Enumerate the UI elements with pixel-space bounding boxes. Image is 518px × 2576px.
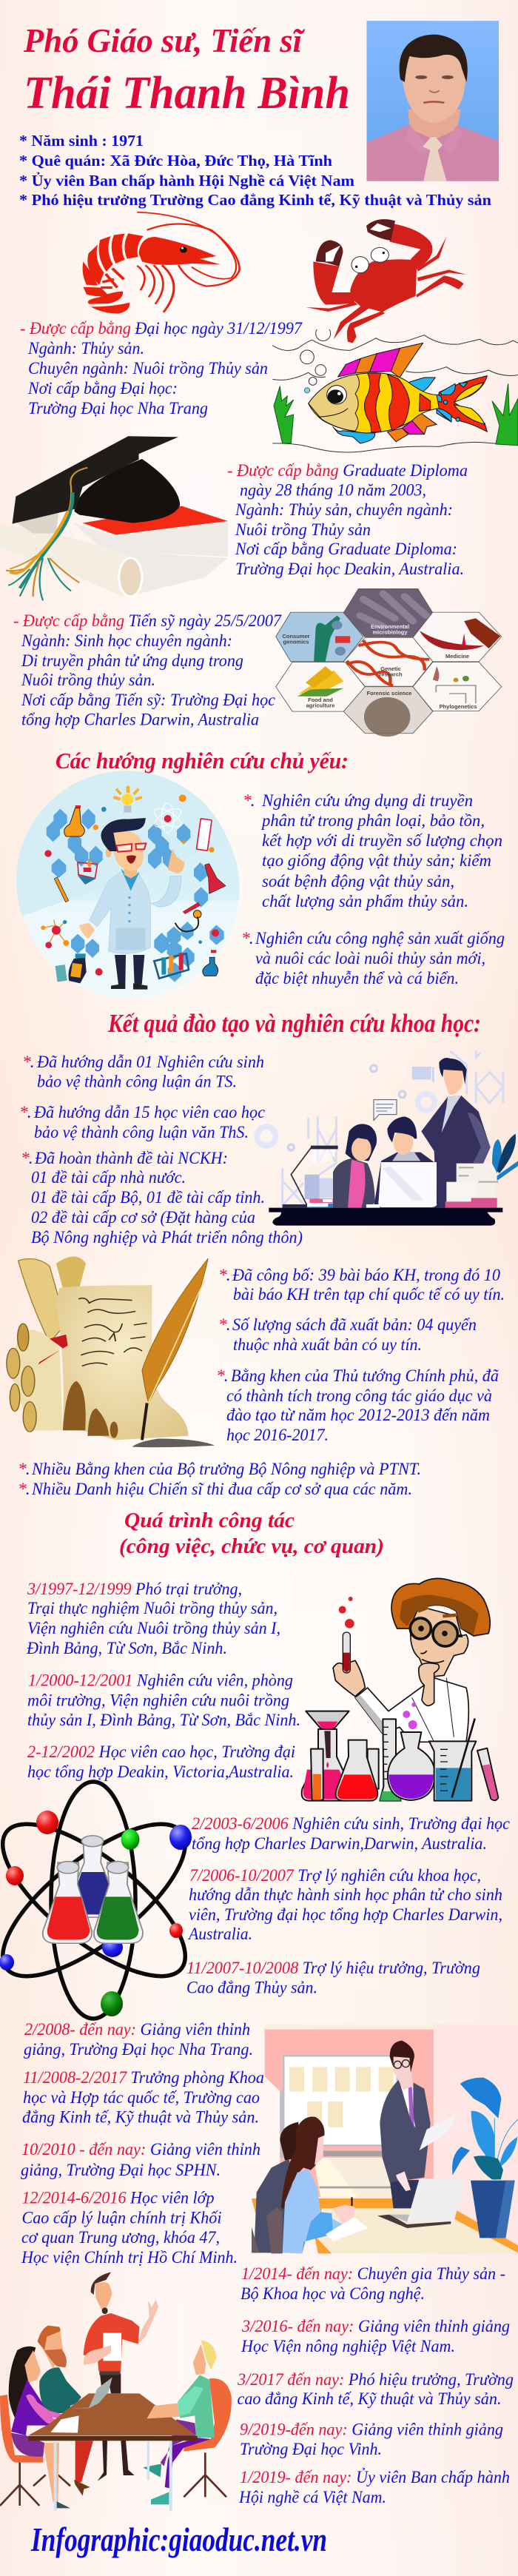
label: phylogenetics: Phylogenetics xyxy=(440,703,477,710)
text block: doctorate xyxy=(13,611,282,730)
text block: career 1997-2002: 1/2000-12/2001 Nghiên cứu viên, phòng xyxy=(28,1671,293,1691)
illustration: lab scientist and flasks xyxy=(302,1578,498,1801)
text block: career 2008-2016: học và Hợp tác quốc tế, Trường cao xyxy=(23,2088,260,2107)
text block: career 1997-2002: Trại thực nghiệm Nuôi trồng thủy sản, xyxy=(27,1599,278,1618)
text block: publications and awards: có thành tích trong công tác giáo dục và xyxy=(226,1386,492,1406)
text block: career 1997-2002: 3/1997-12/1999 Phó trại trưởng, xyxy=(27,1580,242,1599)
text block: supervision and projects: Đã hoàn thành đề tài NCKH: xyxy=(34,1149,228,1168)
text block: graduate diploma: Trường Đại học Deakin, Australia. xyxy=(235,560,464,579)
text block: career 2008-2016: 11/2008-2/2017 Trưởng phòng Khoa xyxy=(23,2068,264,2087)
text block: research direction 1: *. xyxy=(243,791,255,811)
text block: current positions: Hội nghề cá Việt Nam. xyxy=(238,2488,386,2507)
title: Thái Thanh Bình xyxy=(24,68,350,118)
illustration: atom with flasks xyxy=(0,1782,207,2019)
seated woman xyxy=(333,1124,377,1208)
title: Phó Giáo sư, Tiến sĩ xyxy=(23,22,305,59)
text block: current positions: 3/2016- đến nay: Giảng viên thỉnh giảng xyxy=(241,2317,510,2336)
test tube xyxy=(343,1632,350,1673)
text block: publications and awards: Số lượng sách đã xuất bản: 04 quyển xyxy=(232,1315,477,1335)
seated man blonde xyxy=(143,2341,217,2504)
text block: doctorate: Nuôi trồng thủy sản. xyxy=(21,671,155,690)
text block: career 2003-2008: 2/2003-6/2006 Nghiên cứu sinh, Trường đại học xyxy=(192,1814,511,1834)
red trousers xyxy=(74,2441,93,2496)
text block: career 2003-2008: 11/2007-10/2008 Trợ lý hiệu trưởng, Trường xyxy=(186,1959,480,1978)
illustration: scientist in circle xyxy=(16,771,240,998)
table xyxy=(28,2378,198,2511)
text block: publications and awards: *. xyxy=(218,1266,230,1285)
illustration: office team at desk xyxy=(257,1050,518,1226)
text block: supervision and projects: *. xyxy=(21,1149,33,1168)
speech bubble xyxy=(374,1100,397,1120)
standing man xyxy=(421,1058,491,1208)
text block: graduate diploma xyxy=(227,461,468,579)
text block: bachelor degree: Ngành: Thủy sản. xyxy=(27,339,144,358)
text block: research direction 2: và nuôi các loài nuôi thủy sản mới, xyxy=(255,949,485,968)
text block: bachelor degree: Chuyên ngành: Nuôi trồng Thủy sản xyxy=(28,359,268,378)
icon: fish in water xyxy=(272,329,518,452)
text block: current positions: 1/2014- đến nay: Chuyên gia Thủy sản - xyxy=(241,2264,505,2284)
text block: research direction 2 xyxy=(241,929,505,988)
text block: career 2003-2008: Australia. xyxy=(187,1925,252,1944)
text block: career 2003-2008: viên, Trường đại học tổng hợp Charles Darwin, xyxy=(189,1905,502,1925)
text block: current positions: 9/2019-đến nay: Giảng viên thỉnh giảng xyxy=(240,2421,503,2440)
text block: supervision and projects: bảo vệ thành công luận án TS. xyxy=(37,1072,237,1091)
text block: supervision and projects: 01 đề tài cấp nhà nước. xyxy=(31,1168,186,1187)
text block: current positions: 3/2017 đến nay: Phó hiệu trưởng, Trường xyxy=(237,2370,514,2389)
text block: bachelor degree: Trường Đại học Nha Trang xyxy=(28,399,208,418)
text block: career 2008-2016: 12/2014-6/2016 Học viên lớp xyxy=(22,2188,215,2207)
plant xyxy=(492,1134,518,1181)
text block: career 2008-2016: 2/2008- đến nay: Giảng viên thỉnh xyxy=(24,2020,250,2039)
text block: career 1997-2002: Viện nghiên cứu Nuôi trồng thủy sản I, xyxy=(27,1619,280,1638)
text block: honours: Nhiều Danh hiệu Chiến sĩ thi đua cấp cơ sở qua các năm. xyxy=(31,1480,412,1499)
label: medicine: Medicine xyxy=(445,653,469,660)
text block: doctorate: Nơi cấp bằng Tiến sỹ: Trường Đại học xyxy=(21,691,276,710)
text block: research direction 1: phân tử trong phân loại, bảo tồn, xyxy=(260,811,485,831)
text block: career 2003-2008 xyxy=(186,1814,511,1997)
text block: career 2008-2016: đẳng Kinh tế, Kỹ thuật và Thủy sản. xyxy=(22,2108,259,2127)
text block: research direction 2: đặc biệt nhuyễn thể và cá biển. xyxy=(255,969,459,988)
text block: supervision and projects: Đã hướng dẫn 15 học viên cao học xyxy=(33,1103,266,1122)
books xyxy=(283,1198,334,1208)
text block: doctorate: - Được cấp bằng Tiến sỹ ngày 25/5/2007 xyxy=(13,611,282,631)
text block: graduate diploma: ngày 28 tháng 10 năm 2003, xyxy=(240,481,426,500)
text block: graduate diploma: - Được cấp bằng Graduate Diploma xyxy=(227,461,468,480)
illustration: presentation meeting xyxy=(252,2025,518,2254)
text block: publications and awards: *. xyxy=(216,1366,228,1386)
label: environmental microbiology: microbiology xyxy=(372,629,408,635)
text block: current positions: cao đẳng Kinh tế, Kỹ thuật và Thủy sản. xyxy=(237,2389,502,2409)
text block: career 1997-2002: 2-12/2002 Học viên cao học, Trường đại xyxy=(27,1743,295,1762)
icon: shrimp xyxy=(83,212,240,314)
heading: career history xyxy=(119,1509,384,1558)
icon: crab xyxy=(306,219,466,343)
text block: publications and awards: *. xyxy=(218,1315,230,1335)
text block: research direction 1 xyxy=(243,791,502,911)
portrait photo xyxy=(367,21,499,181)
flask set xyxy=(302,1711,498,1801)
text block: publications and awards: học 2016-2017. xyxy=(226,1426,329,1445)
light bulb xyxy=(113,786,142,813)
icon: graduation cap, book and diploma xyxy=(0,436,228,600)
text block: bachelor degree: - Được cấp bằng Đại học ngày 31/12/1997 xyxy=(20,319,303,338)
text block: career 2003-2008: Cao đẳng Thủy sản. xyxy=(186,1978,317,1997)
text block: research direction 1: kết hợp với di truyền số lượng chọn xyxy=(262,831,502,851)
text block: career 2008-2016: giảng, Trường Đại học SPHN. xyxy=(21,2161,221,2180)
label: food and agriculture: agriculture xyxy=(306,702,334,709)
text block: career 2003-2008: tổng hợp Charles Darwin,Darwin, Australia. xyxy=(192,1834,487,1854)
text block: career 1997-2002: Đình Bảng, Từ Sơn, Bắc Ninh. xyxy=(26,1639,227,1658)
text block: supervision and projects: Bộ Nông nghiệp và Phát triển nông thôn) xyxy=(31,1228,303,1247)
footer credit: Infographic:giaoduc.net.vn xyxy=(30,2520,327,2558)
personal info list: * Ủy viên Ban chấp hành Hội Nghề cá Việt Nam xyxy=(19,172,355,189)
man xyxy=(79,818,184,990)
text block: current positions: Bộ Khoa học và Công nghệ. xyxy=(240,2284,425,2304)
text block: current positions xyxy=(237,2264,514,2507)
text block: research direction 1: chất lượng sản phẩm thủy sản. xyxy=(262,892,468,911)
text block: career 2008-2016: 10/2010 - đến nay: Giảng viên thỉnh xyxy=(21,2140,260,2159)
text block: publications and awards: thuộc nhà xuất bản có uy tín. xyxy=(233,1335,422,1355)
seated woman xyxy=(9,2347,70,2508)
paper stacks xyxy=(445,1164,498,1208)
seated man with beard xyxy=(38,2326,81,2413)
label: forensic science: Forensic science xyxy=(367,690,411,697)
text block: graduate diploma: Nuôi trồng Thủy sản xyxy=(235,520,371,540)
text block: career 1997-2002: học tổng hợp Deakin, Victoria,Australia. xyxy=(27,1762,294,1782)
text block: career 1997-2002: thủy sản I, Đình Bảng, Từ Sơn, Bắc Ninh. xyxy=(27,1711,300,1730)
label: consumer genomics: genomics xyxy=(283,638,309,645)
text block: supervision and projects: bảo vệ thành công luận văn ThS. xyxy=(34,1123,249,1142)
text block: supervision and projects: *. xyxy=(22,1053,34,1072)
illustration: parchment scrolls and quill xyxy=(7,1256,215,1447)
text block: supervision and projects: *. xyxy=(19,1103,31,1122)
personal info list: * Phó hiệu trưởng Trường Cao đẳng Kinh tế, Kỹ thuật và Thủy sản xyxy=(19,191,491,209)
text block: doctorate: Di truyền phân tử ứng dụng trong xyxy=(21,651,243,671)
text block: supervision and projects: 01 đề tài cấp Bộ, 01 đề tài cấp tỉnh. xyxy=(31,1188,265,1207)
label: food and agriculture: Food and xyxy=(308,697,333,703)
label: genetic research: Genetic xyxy=(380,665,401,672)
laptop xyxy=(366,1162,437,1208)
label: consumer genomics: Consumer xyxy=(282,633,310,640)
text block: career 2008-2016: Cao cấp lý luận chính trị Khối xyxy=(22,2209,222,2228)
text block: career 2003-2008: 7/2006-10/2007 Trợ lý nghiên cứu khoa học, xyxy=(189,1866,481,1885)
text block: publications and awards: đào tạo từ năm học 2012-2013 đến năm xyxy=(226,1406,490,1425)
personal info list xyxy=(19,132,491,209)
text block: bachelor degree: Nơi cấp bằng Đại học: xyxy=(27,379,178,398)
heading: research directions: Các hướng nghiên cứu chủ yếu: xyxy=(56,748,349,774)
text block: research direction 2: *. xyxy=(241,929,253,948)
text block: research direction 1: soát bệnh động vật thủy sản, xyxy=(262,872,454,891)
personal info list: * Năm sinh : 1971 xyxy=(19,132,144,150)
title xyxy=(23,22,350,118)
text block: graduate diploma: Ngành: Thủy sản, chuyên ngành: xyxy=(235,500,453,520)
text block: career 2008-2016: giảng, Trường Đại học Nha Trang. xyxy=(24,2040,253,2059)
text block: honours: *. xyxy=(18,1460,30,1479)
text block: research direction 1: tạo giống động vật thủy sản; kiểm xyxy=(262,851,491,871)
text block: research direction 1: Nghiên cứu ứng dụng di truyền xyxy=(261,791,473,811)
laptop xyxy=(377,2178,465,2228)
text block: publications and awards: Đã công bố: 39 bài báo KH, trong đó 10 xyxy=(232,1266,500,1285)
orange flask xyxy=(64,805,84,836)
personal info list: * Quê quán: Xã Đức Hòa, Đức Thọ, Hà Tĩnh xyxy=(19,152,332,170)
standing man xyxy=(84,2272,158,2481)
heading: career history: (công việc, chức vụ, cơ quan) xyxy=(119,1534,384,1558)
text block: honours xyxy=(18,1460,421,1499)
text block: research direction 2: Nghiên cứu công nghệ sản xuất giống xyxy=(255,929,505,948)
text block: career 1997-2002: môi trường, Viện nghiên cứu nuôi trồng xyxy=(27,1691,289,1710)
desk lamp xyxy=(291,1147,338,1205)
text block: bachelor degree xyxy=(20,319,303,418)
text block: career 2008-2016: cơ quan Trung ương, khóa 47, xyxy=(21,2228,220,2247)
hexagon panel: genetics applications xyxy=(276,588,502,737)
text block: career 1997-2002 xyxy=(26,1580,300,1782)
heading: career history: Quá trình công tác xyxy=(124,1509,295,1532)
text block: current positions: Học Viện nông nghiệp Việt Nam. xyxy=(240,2337,455,2356)
text block: supervision and projects xyxy=(19,1053,303,1247)
scientist xyxy=(333,1578,490,1742)
potted plant xyxy=(452,2078,518,2238)
illustration: team around a table xyxy=(0,2272,232,2511)
presenter xyxy=(380,2041,457,2208)
right chair xyxy=(184,2378,232,2497)
text block: supervision and projects: Đã hướng dẫn 01 Nghiên cứu sinh xyxy=(36,1053,264,1072)
text block: publications and awards: Bằng khen của Thủ tướng Chính phủ, đã xyxy=(231,1366,499,1386)
text block: career 2008-2016 xyxy=(21,2020,264,2267)
seated man xyxy=(374,1116,439,1208)
label: genetic research: research xyxy=(379,671,403,678)
text block: honours: *. xyxy=(18,1480,30,1499)
text block: supervision and projects: 02 đề tài cấp cơ sở (Đặt hàng của xyxy=(31,1208,255,1227)
label: environmental microbiology: Environmental xyxy=(371,623,409,630)
text block: publications and awards xyxy=(216,1266,505,1445)
text block: honours: Nhiều Bằng khen của Bộ trưởng Bộ Nông nghiệp và PTNT. xyxy=(31,1460,421,1479)
left chair xyxy=(0,2395,70,2506)
text block: graduate diploma: Nơi cấp bằng Graduate Diploma: xyxy=(235,540,457,559)
seated colleagues xyxy=(252,2117,369,2253)
text block: doctorate: tổng hợp Charles Darwin, Australia xyxy=(21,711,259,730)
text block: career 2008-2016: Học viện Chính trị Hồ Chí Minh. xyxy=(21,2248,238,2267)
text block: doctorate: Ngành: Sinh học chuyên ngành: xyxy=(21,631,232,651)
text block: publications and awards: bài báo KH trên tạp chí quốc tế có uy tín. xyxy=(233,1285,505,1304)
text block: current positions: 1/2019- đến nay: Ủy viên Ban chấp hành xyxy=(240,2468,510,2487)
text block: current positions: Trường Đại học Vinh. xyxy=(240,2440,382,2459)
text block: career 2003-2008: hướng dẫn thực hành sinh học phân tử cho sinh xyxy=(189,1885,502,1905)
